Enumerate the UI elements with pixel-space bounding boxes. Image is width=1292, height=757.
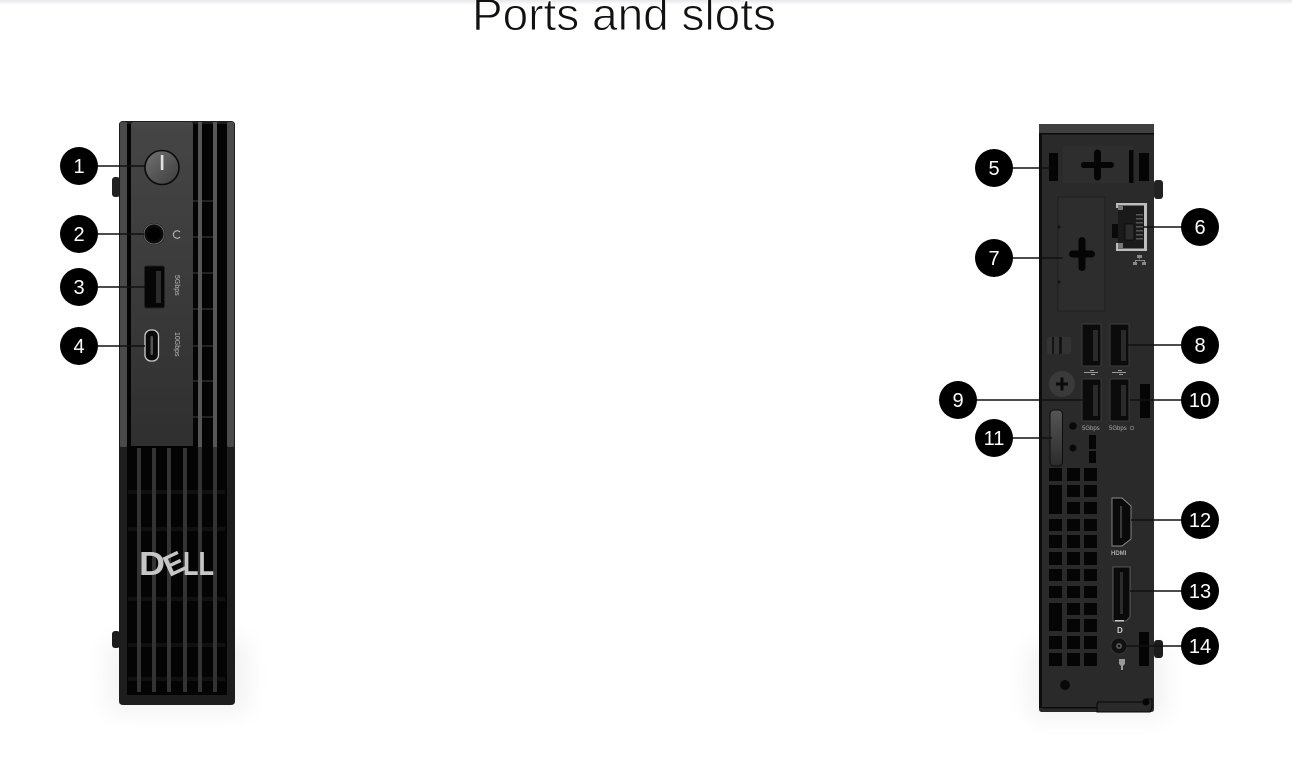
callout 13: 13 xyxy=(1189,581,1211,603)
callout 4 xyxy=(60,327,145,365)
USB-A port 10: 5Gbps xyxy=(1109,426,1127,432)
ventilation grid xyxy=(1049,468,1097,666)
callout 9: 9 xyxy=(952,390,964,412)
USB-C port xyxy=(145,330,180,361)
power jack xyxy=(1111,638,1127,670)
USB-A port 10 xyxy=(1109,379,1134,432)
USB-A port 9: 5Gbps xyxy=(1082,426,1100,432)
USB-C port: 10Gbps xyxy=(173,332,180,357)
Dell logo: D xyxy=(139,545,165,582)
callout 11 xyxy=(975,419,1052,457)
Dell logo xyxy=(139,545,214,584)
callout 3 xyxy=(60,268,145,306)
callout 9 xyxy=(939,381,1084,419)
USB-A port: 5Gbps xyxy=(173,275,180,296)
foot: lower front xyxy=(112,631,120,648)
callout 8 xyxy=(1127,326,1219,364)
callout 6 xyxy=(1143,208,1219,246)
security slot 14 xyxy=(1139,632,1149,666)
callout 2: 2 xyxy=(73,224,85,246)
callout 1 xyxy=(60,147,146,185)
callout 14: 14 xyxy=(1189,636,1211,658)
expansion panel 7 xyxy=(1058,197,1105,311)
callout 3: 3 xyxy=(73,277,85,299)
power button xyxy=(145,150,179,184)
lower details xyxy=(1060,680,1070,690)
callout 4: 4 xyxy=(73,336,85,358)
lower vent ribs xyxy=(137,447,217,692)
USB-A port xyxy=(144,266,180,308)
callout 8: 8 xyxy=(1194,335,1206,357)
USB-A port 9 xyxy=(1082,379,1101,432)
thumbscrew xyxy=(1049,371,1075,397)
foot: upper front xyxy=(112,177,120,197)
callout 12 xyxy=(1131,501,1219,539)
headset jack xyxy=(144,224,180,244)
callout 5: 5 xyxy=(988,158,1000,180)
callout 13 xyxy=(1130,572,1219,610)
padlock latch 11 xyxy=(1050,410,1062,466)
slot cover 5 xyxy=(1063,146,1134,183)
callout 12: 12 xyxy=(1189,510,1211,532)
upper vent dashes xyxy=(193,200,213,418)
HDMI port: HDMI xyxy=(1111,551,1127,557)
DisplayPort port: D xyxy=(1117,626,1123,635)
callout 10 xyxy=(1130,381,1219,419)
foot: lower rear xyxy=(1154,640,1163,658)
USB-A port pair 8 xyxy=(1082,324,1129,375)
callout 11: 11 xyxy=(984,428,1004,450)
callout 1: 1 xyxy=(73,156,85,178)
callout 7: 7 xyxy=(988,248,1000,270)
callout 7 xyxy=(975,239,1063,277)
Dell logo: LL xyxy=(183,545,214,582)
lower vent texture xyxy=(128,490,225,681)
callout 10: 10 xyxy=(1189,390,1211,412)
front panel xyxy=(131,122,193,446)
rear chassis xyxy=(1039,124,1154,712)
callout 14 xyxy=(1125,627,1219,665)
callout 5 xyxy=(975,149,1050,187)
Dell logo: E xyxy=(158,545,190,584)
rear view of the computer xyxy=(1028,124,1166,717)
front view of the computer xyxy=(108,121,248,712)
ethernet port xyxy=(1112,203,1147,265)
callout 6: 6 xyxy=(1194,217,1206,239)
chassis frame xyxy=(119,121,235,705)
callout 2 xyxy=(60,215,144,253)
foot: upper rear xyxy=(1154,180,1163,199)
small holes xyxy=(1089,435,1096,463)
ventilation slots beside cover xyxy=(1049,153,1150,418)
HDMI port xyxy=(1111,498,1131,557)
DisplayPort port xyxy=(1113,567,1130,635)
cable clip xyxy=(1047,337,1071,354)
